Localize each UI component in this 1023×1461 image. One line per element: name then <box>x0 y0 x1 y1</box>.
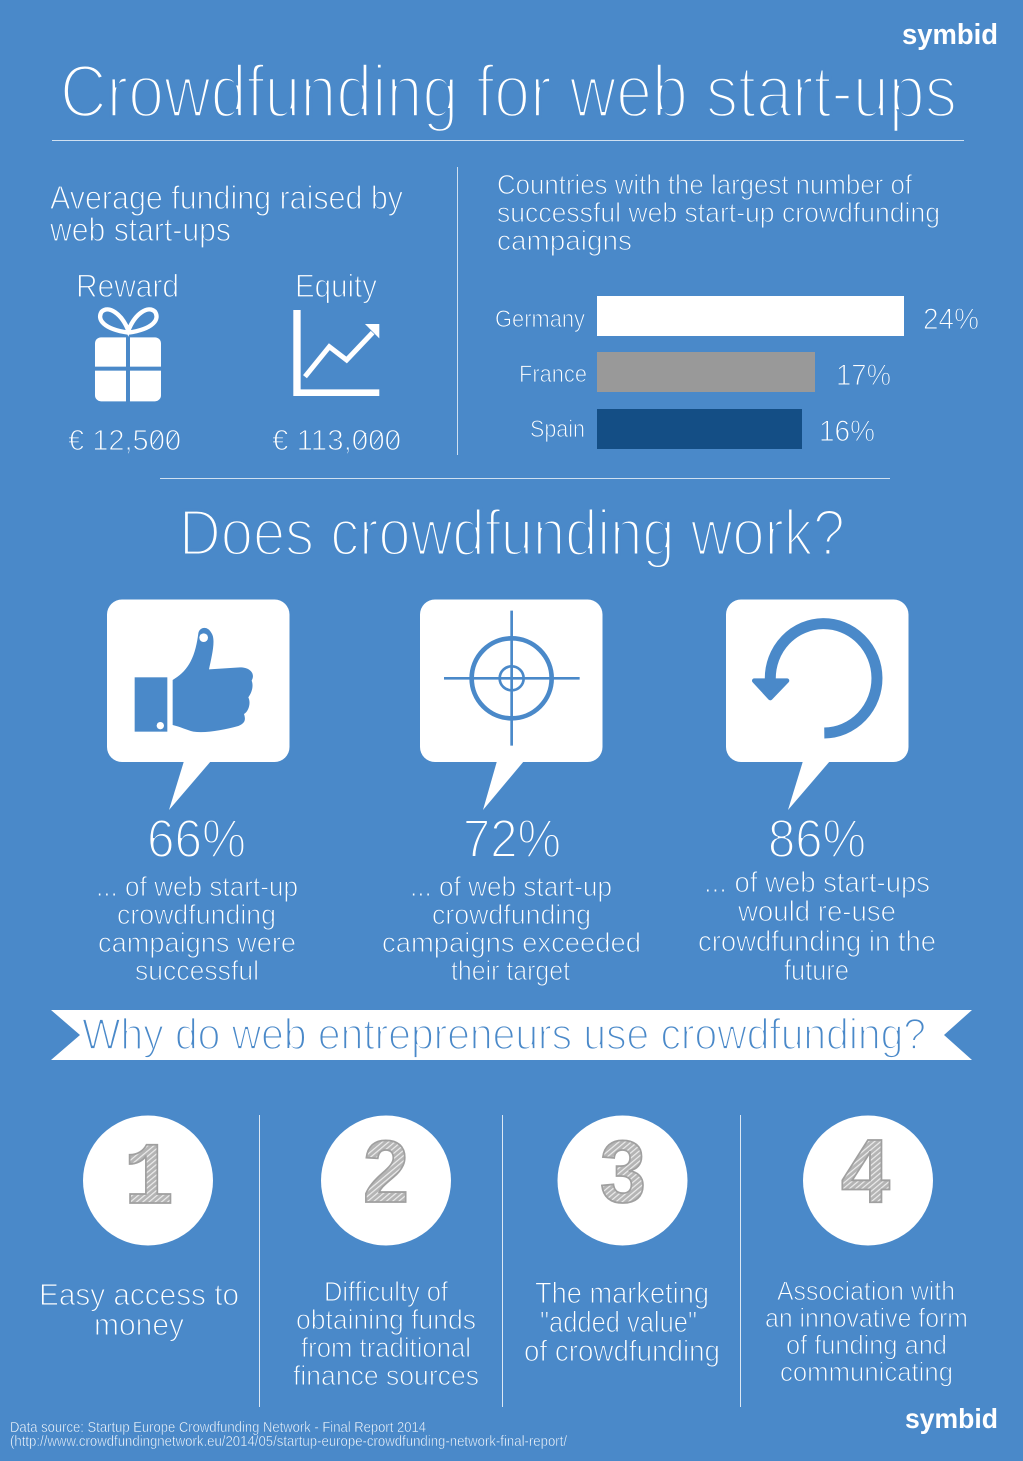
text: reason 3: The marketing <box>535 1277 709 1310</box>
banner: why do web entrepreneurs use crowdfunding: Why do web entrepreneurs use crowdfunding? <box>82 1010 926 1059</box>
icon: speech bubble with return arrow <box>726 600 908 810</box>
icon: number 4 <box>803 1116 933 1246</box>
icon: number 2: 2 <box>363 1122 409 1221</box>
logo: symbid bottom: symbid <box>905 1403 998 1434</box>
heading: average funding: Average funding raised by <box>50 179 403 216</box>
text: reason 2: Difficulty of <box>324 1276 448 1307</box>
icon: number 1: 1 <box>124 1131 174 1230</box>
panel: exceeded target <box>382 600 641 986</box>
text: 86% description: ... of web start-ups <box>704 867 930 899</box>
text: 72% description: their target <box>451 955 570 986</box>
text: reason 2: finance sources <box>293 1360 479 1391</box>
text: reason 4: communicating <box>780 1357 953 1387</box>
heading: average funding <box>49 179 403 248</box>
text: reason 4: Association with <box>777 1276 955 1306</box>
heading: countries: successful web start-up crowdfunding <box>497 197 940 228</box>
text: 66% description <box>96 871 298 986</box>
text: reason 1: Easy access to <box>39 1277 239 1312</box>
icon: number 1 <box>83 1116 213 1246</box>
panel: reason 3 <box>524 1116 720 1368</box>
icon: number 2 <box>321 1116 451 1246</box>
panel: reason 2 <box>293 1116 479 1391</box>
text: data source: Data source: Startup Europe Crowdfunding Network - Final Report 2014 <box>10 1420 426 1436</box>
text: 86% description: future <box>784 955 849 987</box>
text: 72% description: campaigns exceeded <box>382 927 641 958</box>
text: 86% description: would re-use <box>737 896 896 928</box>
stat: 72%: 72% <box>463 809 561 869</box>
text: reason 4 <box>765 1276 968 1387</box>
text: data source <box>10 1420 568 1450</box>
label: reward: Reward <box>76 268 179 304</box>
panel: countries <box>495 169 979 449</box>
text: reason 2: obtaining funds <box>296 1304 476 1335</box>
stat: 66%: 66% <box>147 809 246 869</box>
text: reason 4: an innovative form <box>765 1303 968 1333</box>
text: data source: (http://www.crowdfundingnetwork.eu/2014/05/startup-europe-crowdfunding-network-final-report/ <box>10 1434 568 1450</box>
text: reason 3: of crowdfunding <box>524 1335 720 1368</box>
icon: number 4: 4 <box>841 1122 890 1222</box>
logo: symbid top: symbid <box>902 19 998 51</box>
text: 66% description: successful <box>135 955 259 986</box>
value: equity amount: € 113,000 <box>272 425 401 457</box>
icon: gift <box>93 309 163 403</box>
text: 72% description <box>382 871 641 986</box>
heading: does crowdfunding work: Does crowdfunding work? <box>179 496 845 569</box>
bar chart: 24% <box>923 303 979 336</box>
bar chart: Germany <box>495 306 585 333</box>
panel: would re-use <box>698 600 936 987</box>
text: 66% description: ... of web start-up <box>96 871 298 902</box>
text: 72% description: crowdfunding <box>432 899 591 930</box>
panel: reason 4 <box>765 1116 968 1387</box>
label: equity: Equity <box>295 268 377 304</box>
text: reason 2 <box>293 1276 479 1391</box>
icon: rising chart <box>293 310 379 396</box>
heading: countries <box>497 169 940 256</box>
text: 66% description: campaigns were <box>98 927 296 958</box>
bar chart <box>495 296 979 449</box>
text: reason 3: "added value" <box>540 1306 697 1339</box>
panel: average funding <box>49 179 403 457</box>
text: 86% description <box>698 867 936 987</box>
panel: reason 1 <box>39 1116 239 1342</box>
bar chart: 16% <box>819 415 875 448</box>
text: 72% description: ... of web start-up <box>410 871 612 902</box>
text: reason 1: money <box>94 1307 184 1342</box>
panel: successful campaigns <box>96 600 298 986</box>
heading: average funding: web start-ups <box>49 211 231 248</box>
text: reason 1 <box>39 1277 239 1342</box>
bar chart: France <box>519 361 587 388</box>
text: 66% description: crowdfunding <box>117 899 276 930</box>
heading: countries: Countries with the largest number of <box>497 169 912 200</box>
icon: speech bubble with thumbs up <box>107 600 290 810</box>
stat: 86%: 86% <box>768 809 866 869</box>
text: 86% description: crowdfunding in the <box>698 926 936 958</box>
icon: number 3 <box>558 1116 688 1246</box>
heading: countries: campaigns <box>497 225 632 256</box>
icon: speech bubble with target <box>420 600 602 810</box>
value: reward amount: € 12,500 <box>68 425 181 457</box>
icon: number 3: 3 <box>600 1122 646 1221</box>
text: reason 4: of funding and <box>786 1330 947 1360</box>
bar chart: 17% <box>836 359 891 392</box>
text: reason 2: from traditional <box>301 1332 471 1363</box>
bar chart: Spain <box>530 416 585 443</box>
text: reason 3 <box>524 1277 720 1368</box>
